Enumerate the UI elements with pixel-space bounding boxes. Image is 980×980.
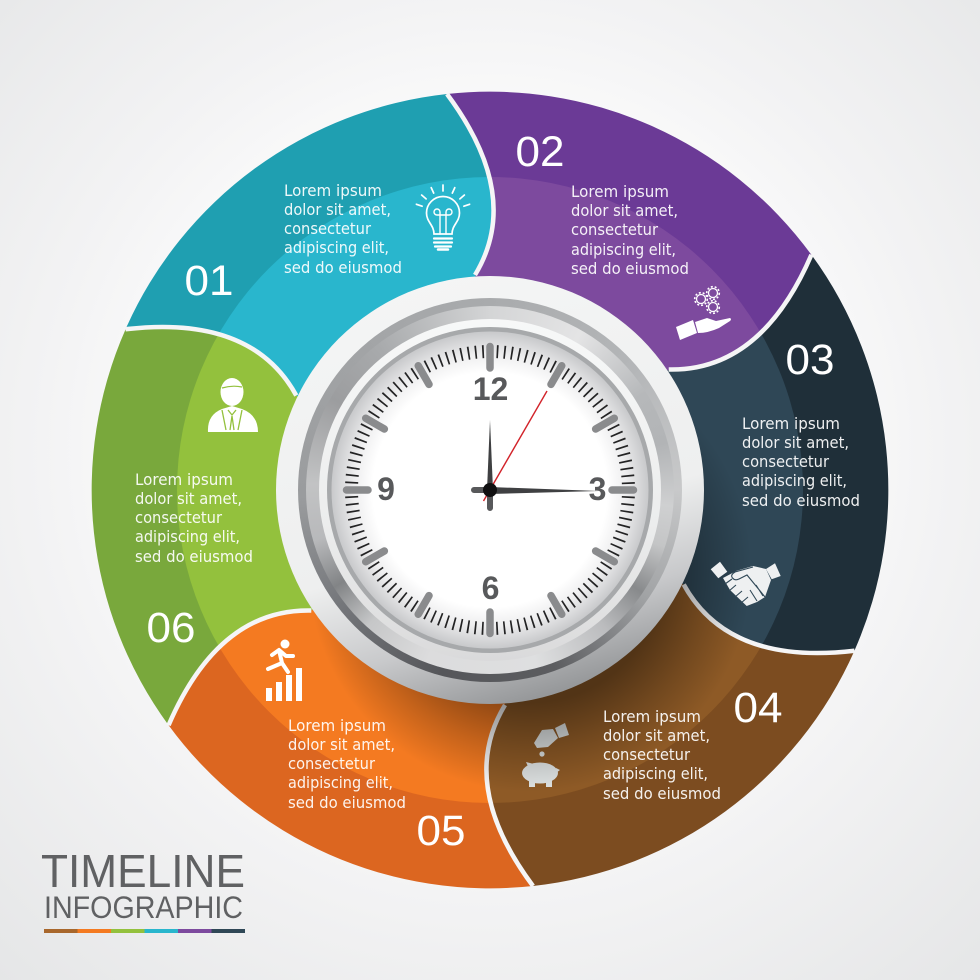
text block 05: sed do eiusmod (288, 794, 406, 812)
text block 02: sed do eiusmod (571, 260, 689, 278)
segment 04 brown (329, 453, 856, 968)
circular diagram: six coloured segments (92, 92, 888, 888)
text block 04: dolor sit amet, (603, 727, 710, 745)
text block 02 (571, 183, 689, 278)
icon: piggy bank and coin (522, 723, 569, 787)
text block 05 (288, 717, 406, 812)
icon: runner on rising bars (266, 640, 302, 701)
number 01: 01 (184, 257, 234, 305)
colour strip (44, 929, 245, 933)
text block 06: Lorem ipsum (135, 471, 233, 489)
clock backing disc (276, 276, 704, 704)
text block 04: Lorem ipsum (603, 708, 701, 726)
text block 01: dolor sit amet, (284, 201, 391, 219)
clock hands (474, 391, 599, 508)
text block 03: Lorem ipsum (742, 415, 840, 433)
text block 02: adipiscing elit, (571, 241, 676, 259)
text block 02: consectetur (571, 221, 659, 239)
text block 04: adipiscing elit, (603, 765, 708, 783)
number 05: 05 (416, 807, 466, 855)
text block 06: dolor sit amet, (135, 490, 242, 508)
subtitle: INFOGRAPHIC: INFOGRAPHIC (44, 889, 243, 925)
icon: light bulb (416, 185, 470, 250)
text block 02: dolor sit amet, (571, 202, 678, 220)
text block 06: sed do eiusmod (135, 548, 253, 566)
icon: hand holding gears (676, 287, 731, 340)
text block 06 (135, 471, 253, 566)
numeral 9: 9 (377, 471, 395, 507)
numeral 3: 3 (589, 471, 606, 507)
number 02: 02 (516, 128, 564, 176)
numeral 6: 6 (482, 570, 499, 606)
segment 06 green (0, 212, 511, 726)
clock shadow (308, 348, 752, 792)
text block 05: dolor sit amet, (288, 736, 395, 754)
text block 01: Lorem ipsum (284, 182, 382, 200)
text block 03: consectetur (742, 453, 830, 471)
icon: businessman (208, 378, 258, 432)
metallic clock ring (306, 306, 674, 674)
text block 04: consectetur (603, 746, 691, 764)
text block 04: sed do eiusmod (603, 785, 721, 803)
minute ticks (352, 352, 628, 628)
number 06: 06 (146, 604, 196, 652)
text block 01: consectetur (284, 220, 372, 238)
title: TIMELINE: TIMELINE (41, 845, 245, 897)
lighter inner band of the segments (177, 177, 803, 803)
segment 03 dark slate (468, 254, 980, 768)
segment 05 orange (169, 490, 533, 888)
text block 01: sed do eiusmod (284, 259, 402, 277)
text block 05: Lorem ipsum (288, 717, 386, 735)
text block 03 (742, 415, 860, 510)
numeral 12: 12 (473, 371, 508, 407)
text block 03: adipiscing elit, (742, 472, 847, 490)
text block 02: Lorem ipsum (571, 183, 669, 201)
text block 06: adipiscing elit, (135, 528, 240, 546)
text block 04 (603, 708, 721, 803)
text block 01 (284, 182, 402, 277)
text block 06: consectetur (135, 509, 223, 527)
text block 05: adipiscing elit, (288, 774, 393, 792)
number 03: 03 (786, 336, 834, 384)
text block 05: consectetur (288, 755, 376, 773)
number 04: 04 (734, 684, 782, 732)
bezel rings (319, 319, 661, 661)
segment 02 purple (447, 92, 811, 490)
text block 03: dolor sit amet, (742, 434, 849, 452)
segment 01 teal (124, 12, 651, 527)
clock outer band (298, 298, 682, 682)
icon: handshake (711, 562, 781, 606)
text block 03: sed do eiusmod (742, 492, 860, 510)
text block 01: adipiscing elit, (284, 239, 389, 257)
hour ticks (346, 346, 634, 634)
